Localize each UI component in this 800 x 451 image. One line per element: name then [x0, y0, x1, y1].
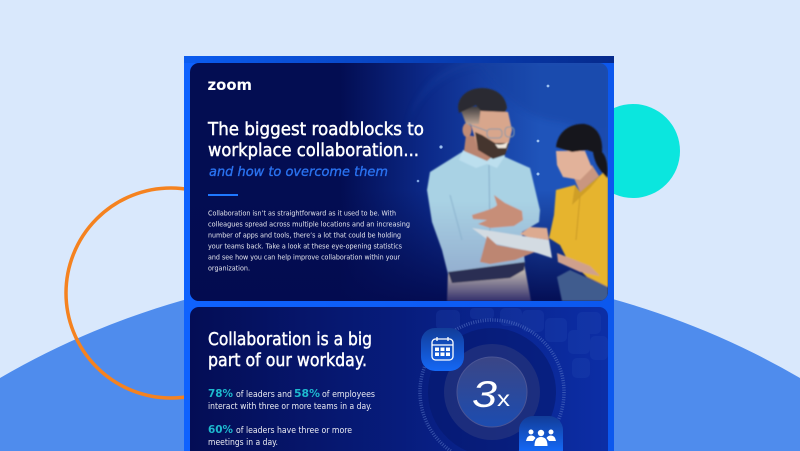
statistic: teams: of leaders and: [236, 390, 292, 400]
panel: workday: [190, 307, 608, 451]
woman's hair: [556, 124, 607, 178]
photo: two colleagues with a tablet: [427, 88, 608, 301]
logo: zoom: zoom: [208, 76, 252, 94]
statistic: teams: [208, 387, 375, 412]
man's belt: [448, 262, 525, 283]
hand on chest: [472, 195, 523, 228]
woman's jeans: [557, 270, 608, 301]
woman's hand: [520, 227, 549, 240]
statistic: teams: of employees: [322, 390, 375, 400]
woman's forearm: [557, 253, 600, 276]
man's smile: [495, 142, 508, 148]
title: The biggest roadblocks to: [207, 120, 424, 140]
3x radial graphic: [420, 320, 564, 451]
stat: 3x: x: [497, 388, 511, 411]
statistic: meetings: of leaders have three or more: [236, 426, 352, 436]
intro paragraph: Collaboration isn’t as straightforward as it used to be. With: [208, 208, 396, 218]
infographic frame: [184, 56, 614, 451]
statistic: teams: 78%: [208, 387, 233, 400]
stat: 3x: 3: [472, 374, 498, 415]
statistic: meetings: [208, 423, 352, 448]
woman's neck: [574, 165, 599, 192]
background blobs: [405, 60, 612, 182]
woman's face: [556, 151, 592, 180]
statistic: teams: 58%: [294, 387, 320, 400]
man's neck: [463, 134, 492, 162]
man's trousers: [447, 263, 531, 301]
intro paragraph: your teams back. Take a look at these eye-opening statistics: [208, 242, 402, 250]
statistic: meetings: 60%: [208, 423, 233, 436]
panel: hero: [190, 60, 612, 301]
man's side fade: [460, 106, 481, 124]
man's face: [470, 110, 513, 151]
subtitle: and how to overcome them: [209, 164, 388, 180]
heading: collaboration: [208, 330, 372, 371]
decorative orange ring: [66, 188, 276, 398]
intro paragraph: colleagues spread across multiple locations and an increasing: [208, 220, 410, 228]
statistic: teams: interact with three or more teams in a day.: [208, 402, 372, 412]
intro paragraph: number of apps and tools, there’s a lot that could be holding: [208, 230, 401, 240]
intro paragraph: organization.: [208, 264, 250, 272]
title: workplace collaboration...: [208, 141, 419, 161]
heading: collaboration: Collaboration is a big: [208, 330, 372, 350]
icon: calendar: [421, 328, 464, 371]
heading: collaboration: part of our workday.: [208, 351, 367, 371]
shirt collar: [459, 148, 505, 168]
statistic: meetings: meetings in a day.: [208, 438, 278, 448]
woman's top: [549, 173, 608, 287]
woman: [549, 124, 608, 301]
man: [427, 88, 540, 301]
stat: 3x: [472, 374, 511, 415]
man's beard: [475, 132, 509, 159]
intro paragraph: [208, 208, 410, 272]
decorative blue arc: [0, 270, 800, 451]
intro paragraph: and see how you can help improve collaboration within your: [208, 252, 400, 262]
accent divider: [208, 194, 238, 196]
title: [207, 120, 424, 161]
man's shirt: [427, 152, 540, 274]
tablet: [472, 228, 552, 258]
man's hair: [458, 88, 507, 113]
man's glasses: [468, 124, 514, 138]
background tiles: [436, 308, 608, 378]
man's lower hand: [480, 236, 535, 264]
decorative teal circle: [586, 104, 680, 198]
icon: team: [519, 416, 563, 451]
man's ear: [462, 123, 472, 137]
